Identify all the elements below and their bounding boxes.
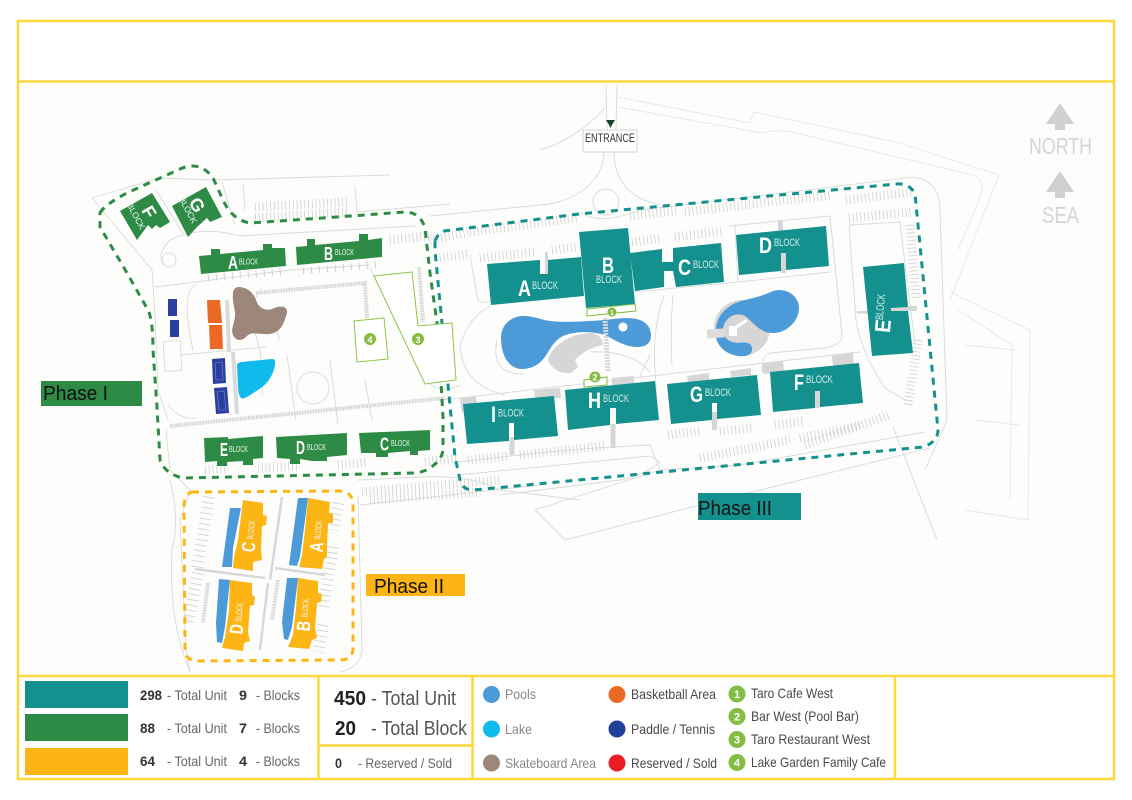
phase I buildings xyxy=(120,187,430,466)
building: A block xyxy=(289,498,333,569)
venue 4: 4 xyxy=(734,758,741,770)
marker 4: 4 xyxy=(367,335,373,345)
venue 1: Taro Cafe West xyxy=(751,685,833,701)
legend item: pools xyxy=(483,686,536,703)
legend: grand totals: 0 xyxy=(335,755,342,771)
building: E block: E xyxy=(220,439,228,460)
building: H block xyxy=(565,381,659,430)
legend: grand totals xyxy=(334,688,468,771)
building: F block: F xyxy=(794,370,804,395)
phase III buildings xyxy=(460,220,917,455)
legend: grand totals: - Total Unit xyxy=(371,688,456,710)
phase I label: Phase I xyxy=(43,383,108,405)
legend item: reserved sold: Reserved / Sold xyxy=(631,755,717,771)
building: A block: BLOCK xyxy=(312,520,324,540)
marker 3 xyxy=(412,333,424,345)
building: D block: BLOCK xyxy=(307,442,326,452)
phase II buildings xyxy=(216,498,333,651)
venue 2: Bar West (Pool Bar) xyxy=(751,708,859,724)
building: A block: A xyxy=(307,541,328,553)
building: E block xyxy=(204,436,263,466)
walkways xyxy=(170,267,445,623)
phase I row: 88 xyxy=(140,720,155,736)
legend: grand totals: - Reserved / Sold xyxy=(358,755,452,771)
building: I block xyxy=(463,396,558,444)
building: C block: C xyxy=(239,541,260,553)
building: D block xyxy=(276,433,347,464)
building: F block xyxy=(770,363,863,412)
building: C block: BLOCK xyxy=(245,520,257,540)
building: C block: C xyxy=(678,255,691,280)
building: E block: BLOCK xyxy=(874,293,888,321)
building: B block xyxy=(579,228,635,308)
venue 3: 3 xyxy=(734,734,740,746)
phase III dashed boundary xyxy=(435,184,938,490)
building: H block: H xyxy=(588,388,601,413)
building: A block: BLOCK xyxy=(239,256,258,266)
legend item: paddle tennis xyxy=(608,720,715,738)
building: B block: BLOCK xyxy=(299,598,311,618)
legend item: paddle tennis: Paddle / Tennis xyxy=(631,721,715,737)
building: G block: G xyxy=(690,382,703,407)
phase III row xyxy=(25,681,300,708)
pier xyxy=(707,320,747,339)
legend item: skateboard area xyxy=(483,754,596,772)
building: A block: A xyxy=(228,252,238,273)
building: A block: A xyxy=(518,276,531,301)
building: A block xyxy=(487,257,584,305)
building: B block xyxy=(282,578,322,649)
phase I row: - Total Unit xyxy=(167,720,227,736)
restaurant 4 plot xyxy=(354,318,388,362)
phase II label: Phase II xyxy=(374,576,444,598)
marker 4 xyxy=(364,333,376,345)
bar 2 plot: 2 xyxy=(592,372,598,382)
phase I row: - Blocks xyxy=(256,720,300,736)
phase II row: - Blocks xyxy=(256,753,300,769)
phase II label xyxy=(366,574,465,598)
venue 1: 1 xyxy=(734,689,740,701)
building: E block xyxy=(863,263,913,356)
pool footbridge xyxy=(605,318,608,372)
building: I block: I xyxy=(491,402,496,427)
building: C block xyxy=(222,500,267,571)
bar 2 plot xyxy=(584,372,607,387)
legend item: reserved sold xyxy=(608,754,717,772)
building: C block: BLOCK xyxy=(693,259,719,271)
building: A block: BLOCK xyxy=(532,280,558,292)
phase I row: 7 xyxy=(239,720,247,736)
skateboard area xyxy=(232,287,287,340)
legend: grand totals: 20 xyxy=(335,718,356,740)
legend item: basketball area xyxy=(608,686,716,703)
building: G block xyxy=(172,187,222,237)
phase II row xyxy=(25,748,300,775)
phase III label xyxy=(698,493,801,520)
building: B block: B xyxy=(602,253,614,278)
marker 3: 3 xyxy=(415,335,421,345)
plaza crescent xyxy=(548,333,603,373)
building: G block xyxy=(667,375,761,424)
compass: north: NORTH xyxy=(1029,133,1092,159)
parking stripes xyxy=(188,192,918,652)
building: D block xyxy=(216,579,255,651)
phase II row: 64 xyxy=(140,753,155,769)
cafe 1 plot xyxy=(587,304,636,317)
building: D block: D xyxy=(227,623,248,635)
building: B block xyxy=(296,234,382,265)
compass: sea: SEA xyxy=(1042,202,1080,228)
building: C block: C xyxy=(380,434,389,454)
icon: basketball courts xyxy=(207,300,223,349)
building: B block: BLOCK xyxy=(335,247,354,257)
building: D block: BLOCK xyxy=(233,602,245,622)
phase I label xyxy=(41,381,142,406)
building: E block: E xyxy=(870,318,896,334)
building: F block xyxy=(120,193,170,240)
legend item: pools: Pools xyxy=(505,686,536,702)
icon: paddle courts xyxy=(168,299,179,337)
phase III label: Phase III xyxy=(698,498,772,520)
building: H block: BLOCK xyxy=(603,393,629,405)
legend: grand totals: - Total Block xyxy=(371,718,468,740)
legend: area colours xyxy=(483,686,717,772)
building: G block: BLOCK xyxy=(177,195,199,225)
legend item: lake: Lake xyxy=(505,721,532,737)
phase II row: 4 xyxy=(239,753,247,769)
compass: north xyxy=(1029,103,1092,159)
legend: numbered venues xyxy=(728,685,886,771)
building: G block: G xyxy=(185,194,209,216)
lake xyxy=(237,359,275,398)
building: D block: D xyxy=(759,233,772,258)
legend: phase totals xyxy=(25,681,300,775)
phase III row: 298 xyxy=(140,687,162,703)
building: D block: BLOCK xyxy=(774,237,800,249)
phase I row xyxy=(25,714,300,741)
legend item: basketball area: Basketball Area xyxy=(631,686,716,702)
pool island xyxy=(618,322,628,332)
venue 2: 2 xyxy=(734,712,740,724)
building: I block: BLOCK xyxy=(498,408,524,420)
venue 1 xyxy=(728,685,833,702)
building: B block: B xyxy=(294,620,315,632)
entrance sign: ENTRANCE xyxy=(585,131,635,145)
building: B block: BLOCK xyxy=(596,274,622,286)
phase III pools and plaza xyxy=(501,290,799,373)
legend item: lake xyxy=(483,720,532,738)
building: G block: BLOCK xyxy=(705,387,731,399)
building: F block: F xyxy=(138,202,160,222)
building: A block xyxy=(199,244,286,274)
left pool xyxy=(501,316,651,369)
phase II dashed boundary xyxy=(184,491,353,661)
building: C block: BLOCK xyxy=(391,438,410,448)
phase I dashed boundary xyxy=(100,166,443,478)
phase III row: 9 xyxy=(239,687,247,703)
compass: sea xyxy=(1042,171,1080,228)
building: C block xyxy=(630,243,724,291)
legend item: skateboard area: Skateboard Area xyxy=(505,755,596,771)
entrance sign xyxy=(583,120,637,152)
building: D block xyxy=(736,226,829,275)
building: D block: D xyxy=(296,437,305,458)
venue 3: Taro Restaurant West xyxy=(751,731,870,747)
courts and amenities phase I xyxy=(168,272,456,414)
map background xyxy=(18,82,1114,676)
legend: grand totals: 450 xyxy=(334,688,366,710)
service stems xyxy=(510,220,917,455)
phase III row: - Total Unit xyxy=(167,687,227,703)
building: F block: BLOCK xyxy=(806,374,833,386)
phase III row: - Blocks xyxy=(256,687,300,703)
building: B block: B xyxy=(324,243,333,264)
venue 4: Lake Garden Family Cafe xyxy=(751,754,886,770)
right pool xyxy=(716,290,799,356)
phase II row: - Total Unit xyxy=(167,753,227,769)
icon: tennis courts xyxy=(212,358,229,414)
right plaza circle xyxy=(714,300,770,356)
building: E block: BLOCK xyxy=(229,444,248,454)
service buildings xyxy=(460,352,854,413)
venue 2 xyxy=(728,708,859,725)
cafe 1 plot: 1 xyxy=(610,310,614,317)
restaurant 3 plot xyxy=(374,272,456,384)
building: F block: BLOCK xyxy=(125,201,147,231)
site plan road outlines xyxy=(92,85,1030,672)
building: C block xyxy=(359,430,430,457)
